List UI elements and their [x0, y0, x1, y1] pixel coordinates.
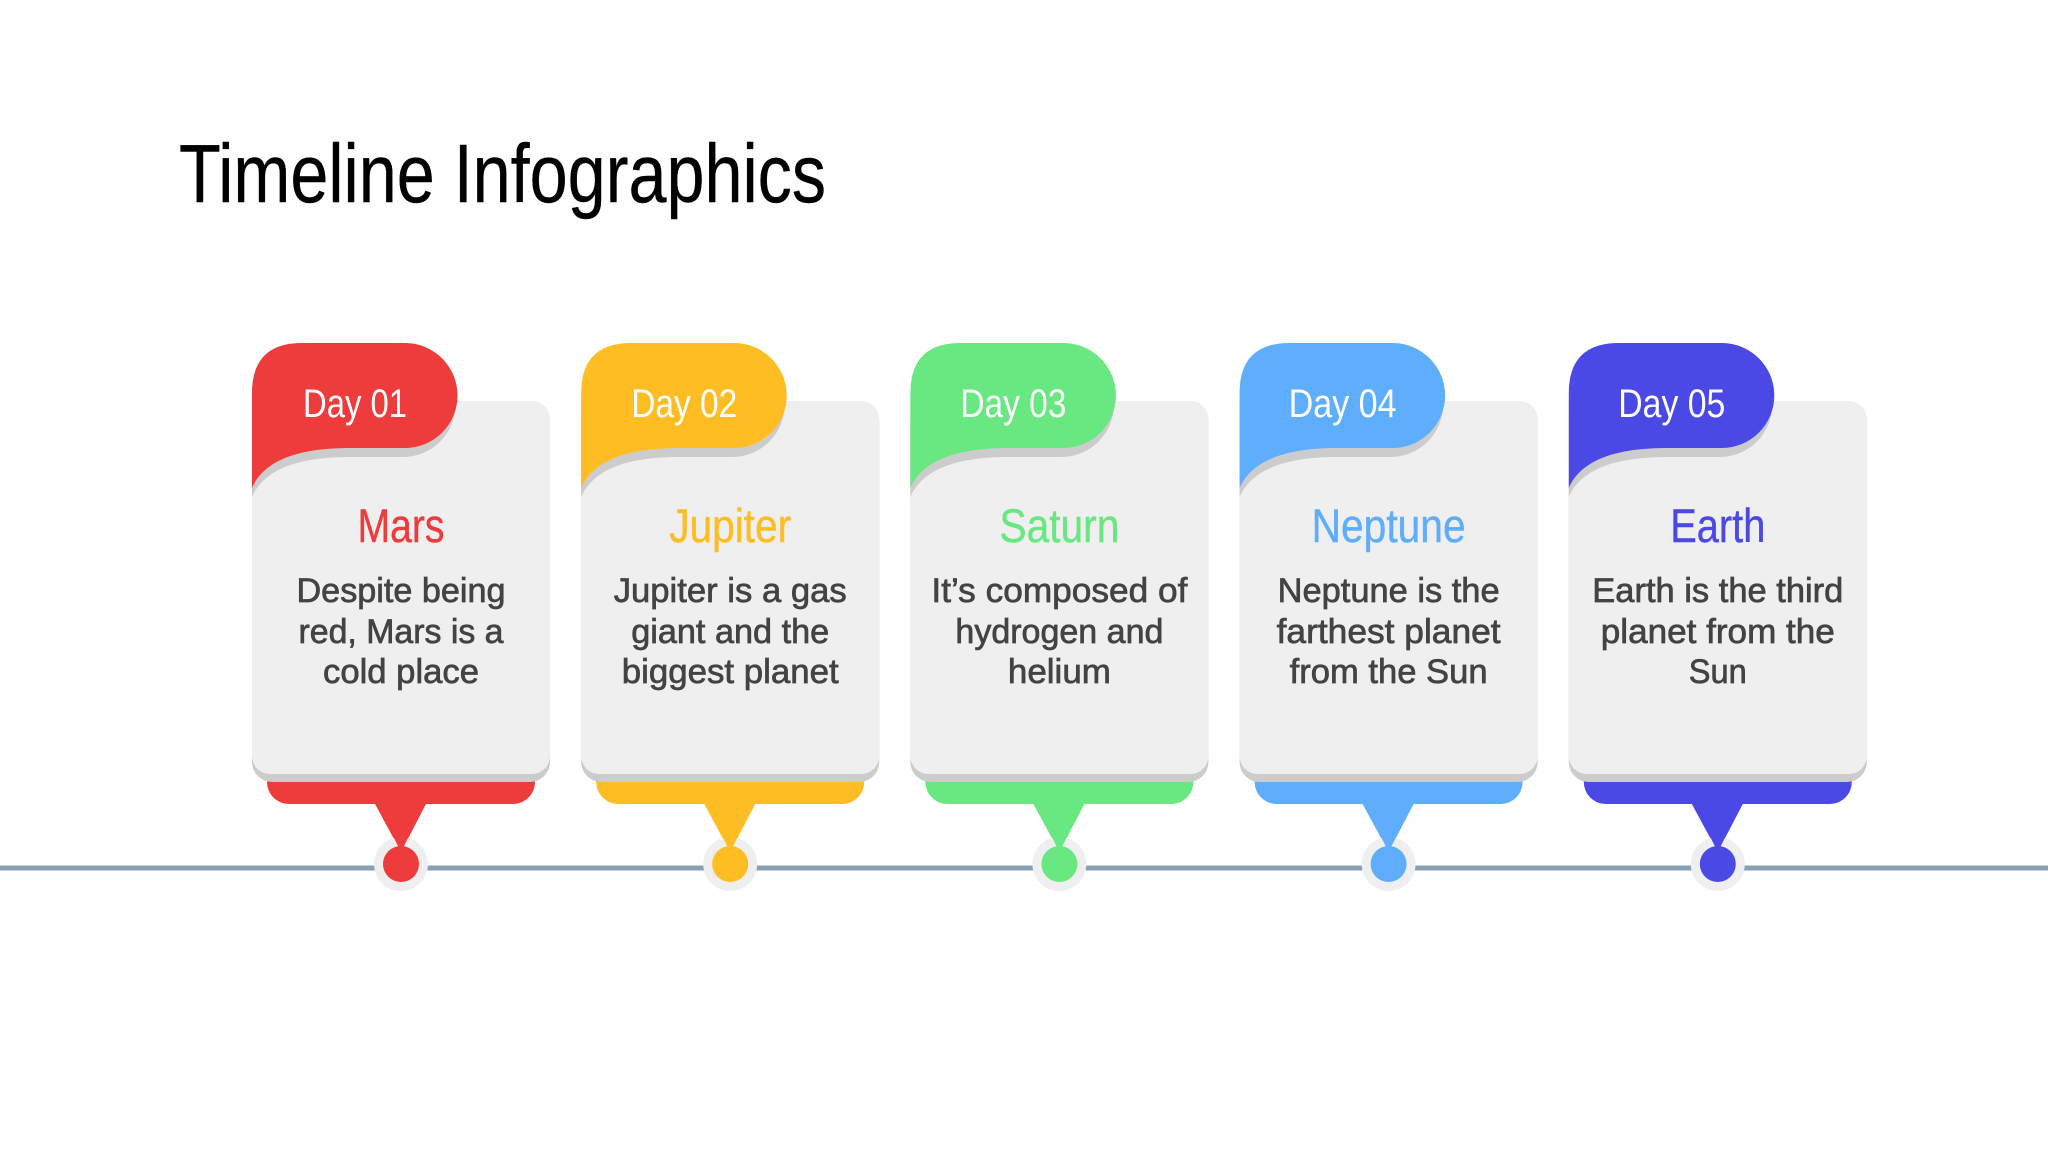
tab shadow — [252, 412, 455, 496]
description: Neptune is the — [1278, 572, 1500, 610]
tab: Day 03 — [910, 343, 1116, 488]
description: farthest planet — [1277, 613, 1501, 651]
tab shadow — [910, 412, 1114, 496]
heading: Jupiter — [669, 499, 791, 552]
heading: Earth — [1670, 499, 1765, 552]
card body — [1569, 401, 1867, 782]
description: Jupiter is a gas — [614, 572, 847, 610]
panel: Day 03 Saturn — [910, 343, 1208, 891]
tab: Day 02: Day 02 — [631, 382, 737, 426]
card body — [1240, 401, 1538, 782]
tab: Day 01: Day 01 — [303, 382, 407, 426]
description — [1592, 572, 1843, 691]
description: cold place — [323, 653, 479, 691]
tab: Day 02 — [581, 343, 787, 488]
panel: Day 04 Neptune — [1240, 343, 1538, 891]
tab: Day 04: Day 04 — [1289, 382, 1397, 426]
description: Sun — [1689, 653, 1747, 691]
tab shadow — [1240, 412, 1442, 496]
tab shadow — [581, 399, 784, 496]
timeline marker — [1362, 826, 1416, 891]
description — [296, 572, 506, 691]
description: hydrogen and — [955, 613, 1163, 651]
description: from the Sun — [1290, 653, 1488, 691]
timeline axis — [0, 866, 2048, 870]
card body — [252, 401, 550, 782]
description — [1277, 572, 1501, 691]
panel: Day 02 Jupiter — [581, 343, 879, 891]
tab shadow — [1568, 400, 1772, 496]
description: giant and the — [631, 613, 829, 651]
pointer foot — [925, 778, 1193, 852]
description: red, Mars is a — [298, 613, 504, 651]
heading: Saturn — [999, 499, 1119, 552]
pointer foot — [596, 778, 864, 852]
timeline marker — [1032, 826, 1086, 891]
panel: Day 01 Mars — [252, 343, 550, 891]
description — [931, 572, 1188, 691]
timeline marker — [703, 826, 757, 891]
title: Timeline Infographics — [179, 127, 826, 220]
timeline marker — [1691, 826, 1745, 891]
tab: Day 05 — [1569, 343, 1774, 488]
description: It’s composed of — [931, 572, 1188, 610]
description: Despite being — [296, 572, 506, 610]
description: biggest planet — [622, 653, 839, 691]
card body — [910, 401, 1208, 782]
description: planet from the — [1601, 613, 1835, 651]
tab: Day 05: Day 05 — [1618, 382, 1725, 426]
card body — [581, 401, 879, 782]
pointer foot — [1584, 778, 1852, 852]
tab: Day 03: Day 03 — [960, 382, 1066, 426]
description: helium — [1008, 653, 1111, 691]
timeline marker — [374, 826, 428, 891]
description — [614, 572, 847, 691]
tab: Day 01 — [252, 343, 458, 488]
pointer foot — [267, 778, 535, 852]
description: Earth is the third — [1592, 572, 1843, 610]
pointer foot — [1255, 778, 1523, 852]
tab: Day 04 — [1240, 343, 1445, 488]
panel: Day 05 Earth — [1569, 343, 1867, 891]
heading: Neptune — [1312, 499, 1466, 552]
heading: Mars — [358, 499, 444, 552]
